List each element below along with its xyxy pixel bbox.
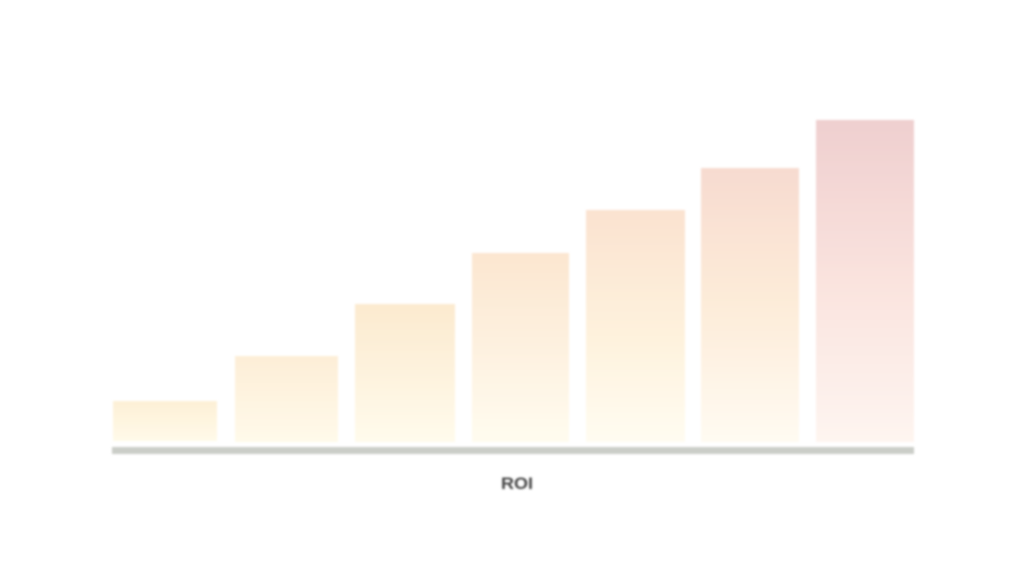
bar 1: [113, 401, 217, 441]
bar 4: [472, 253, 569, 442]
bar 5: [586, 210, 685, 442]
x axis: [112, 447, 914, 454]
bar 7: [816, 120, 914, 442]
bar 3: [355, 304, 455, 442]
bar 6: [701, 168, 799, 442]
axis label: ROI: [501, 474, 533, 493]
bar 2: [235, 356, 338, 442]
